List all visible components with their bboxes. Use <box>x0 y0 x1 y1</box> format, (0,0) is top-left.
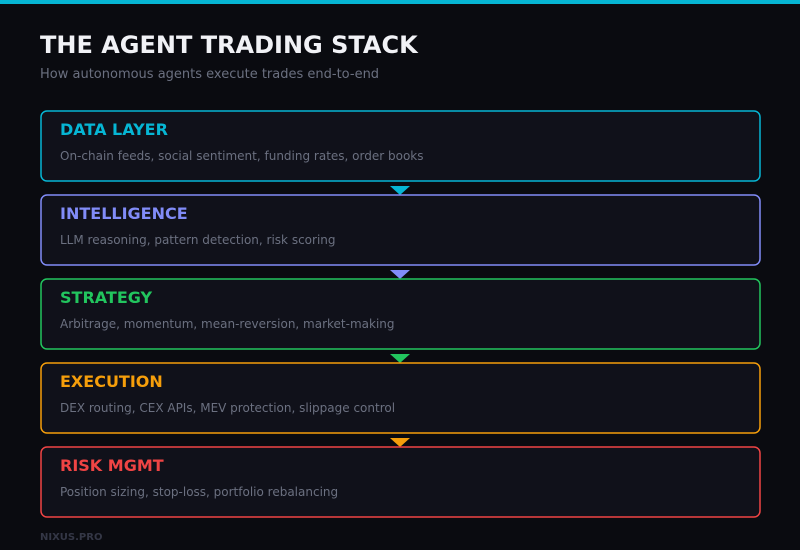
panel: intelligence <box>41 195 760 265</box>
panel: execution: EXECUTION <box>60 372 163 391</box>
panel: execution: DEX routing, CEX APIs, MEV protection, slippage control <box>60 401 395 415</box>
title: THE AGENT TRADING STACK <box>40 31 419 59</box>
panel: data layer: DATA LAYER <box>60 120 168 139</box>
panel: data layer: On-chain feeds, social sentiment, funding rates, order books <box>60 149 424 163</box>
panel: strategy <box>41 279 760 349</box>
arrow: execution to risk <box>390 438 410 447</box>
arrow: strategy to execution <box>390 354 410 363</box>
footer brand: NIXUS.PRO <box>40 532 102 543</box>
panel: strategy: STRATEGY <box>60 288 153 307</box>
subtitle: How autonomous agents execute trades end-to-end <box>40 67 379 82</box>
panel: risk mgmt <box>41 447 760 517</box>
panel: strategy: Arbitrage, momentum, mean-reversion, market-making <box>60 317 395 331</box>
panel: risk mgmt: Position sizing, stop-loss, portfolio rebalancing <box>60 485 338 499</box>
arrow: data to intelligence <box>390 186 410 195</box>
panel: risk mgmt: RISK MGMT <box>60 456 164 475</box>
panel: execution <box>41 363 760 433</box>
panel: intelligence: LLM reasoning, pattern detection, risk scoring <box>60 233 336 247</box>
arrow: intelligence to strategy <box>390 270 410 279</box>
panel: intelligence: INTELLIGENCE <box>60 204 188 223</box>
panel: data layer <box>41 111 760 181</box>
